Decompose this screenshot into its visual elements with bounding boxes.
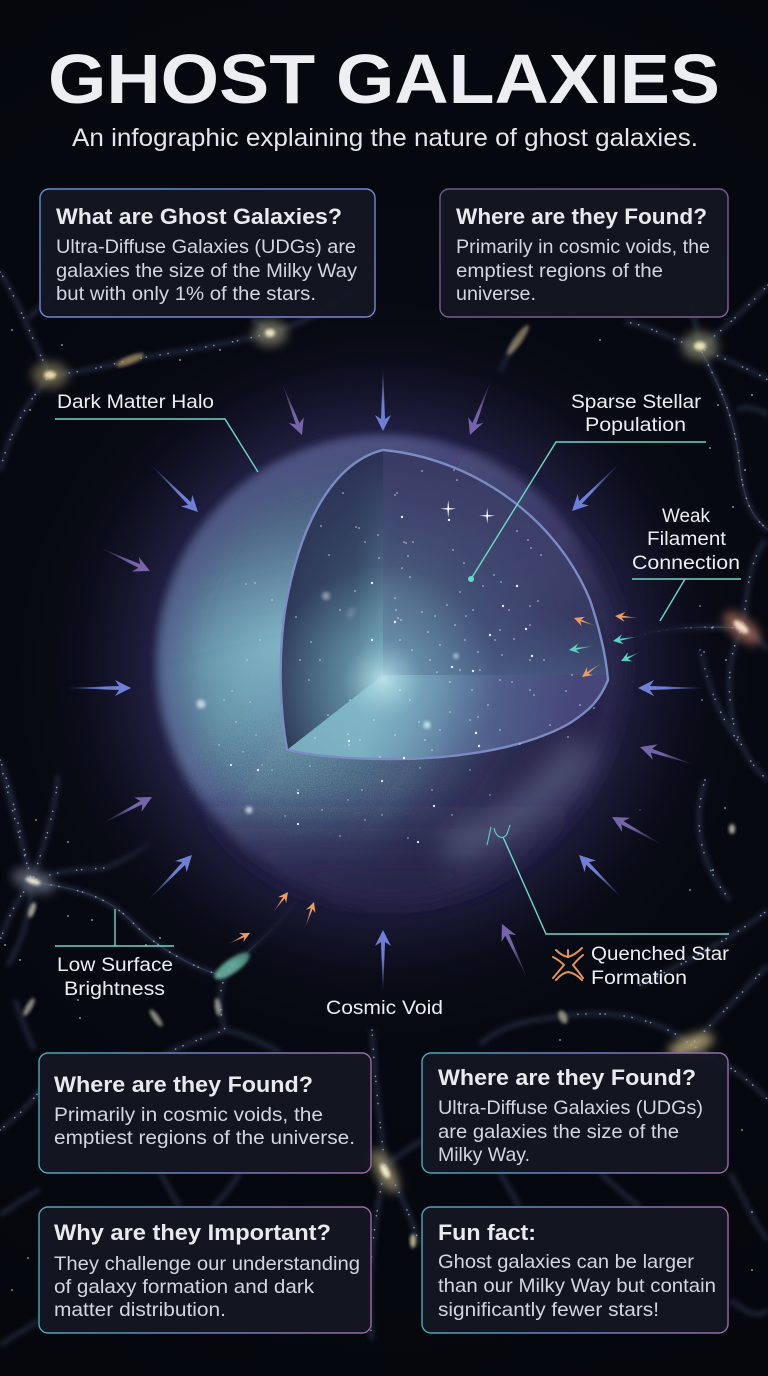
left wall top shade	[285, 450, 383, 675]
label: dark matter halo	[55, 392, 258, 472]
panel: where are they found, top	[440, 189, 728, 317]
stars inside wedge	[296, 470, 594, 758]
panel: fun fact: Fun fact:	[438, 1220, 536, 1245]
panel: where are they found, lower left	[39, 1053, 371, 1173]
subtitle: An infographic explaining the nature of ghost galaxies.	[72, 124, 698, 152]
panel: fun fact: than our Milky Way but contain	[438, 1275, 716, 1297]
panel: where are they found, lower left: Where are they Found?	[54, 1072, 313, 1097]
panel: where are they found, lower left: Primarily in cosmic voids, the	[54, 1104, 323, 1126]
cutaway wedge	[281, 450, 608, 759]
label: sparse stellar population: Sparse Stellar	[571, 392, 702, 413]
panel: where are they found, lower right: Where are they Found?	[438, 1065, 696, 1090]
panel: where are they found, top: emptiest regions of the	[456, 260, 663, 282]
panel: fun fact	[422, 1207, 728, 1333]
panel: where are they found, lower right: Milky Way.	[438, 1144, 530, 1166]
panel: what are ghost galaxies: galaxies the size of the Milky Way	[56, 260, 357, 282]
panel: fun fact: Ghost galaxies can be larger	[438, 1251, 695, 1273]
panel: what are ghost galaxies	[40, 189, 375, 317]
left wedge wall	[281, 450, 383, 750]
label: weak filament connection: Connection	[632, 553, 740, 574]
back right wall	[383, 450, 608, 675]
panel: where are they found, lower right: are galaxies the size of the	[438, 1121, 679, 1143]
label: quenched star formation: Quenched Star	[591, 944, 730, 965]
label: weak filament connection	[632, 506, 741, 621]
panel: why are they important: of galaxy formation and dark	[54, 1276, 314, 1298]
floor of wedge	[287, 675, 608, 759]
panel: why are they important: matter distribution.	[54, 1299, 226, 1321]
filament inflow arrows, bottom left	[225, 889, 319, 949]
panel: what are ghost galaxies: What are Ghost Galaxies?	[56, 204, 342, 229]
panel: what are ghost galaxies: but with only 1% of the stars.	[56, 283, 316, 305]
galaxy blobs on the web	[9, 320, 765, 1248]
panel: where are they found, top: Primarily in cosmic voids, the	[456, 236, 710, 258]
label: sparse stellar population	[468, 392, 706, 582]
cosmic web filaments	[0, 270, 768, 1345]
panel: where are they found, lower left: emptiest regions of the universe.	[54, 1127, 355, 1149]
sphere speckle stars	[196, 583, 490, 842]
label: quenched star formation: Formation	[591, 968, 687, 989]
label: weak filament connection: Filament	[647, 529, 727, 550]
wedge rim	[281, 450, 608, 759]
label: quenched star formation	[487, 825, 730, 989]
label: cosmic void: Cosmic Void	[326, 998, 443, 1019]
label: low surface brightness	[55, 909, 174, 1000]
panel: what are ghost galaxies: Ultra-Diffuse Galaxies (UDGs) are	[56, 236, 356, 258]
panel: why are they important: They challenge our understanding	[54, 1253, 360, 1275]
panel: fun fact: significantly fewer stars!	[438, 1299, 659, 1321]
label: dark matter halo: Dark Matter Halo	[57, 392, 214, 413]
filament inflow arrows, right	[568, 611, 642, 681]
inflow arrows around the void	[65, 365, 706, 995]
title: GHOST GALAXIES	[48, 40, 720, 118]
label: weak filament connection: Weak	[662, 506, 710, 527]
panel: where are they found, lower right	[422, 1053, 728, 1173]
label: low surface brightness: Low Surface	[57, 955, 173, 976]
label: low surface brightness: Brightness	[64, 979, 165, 1000]
core glow	[281, 450, 608, 759]
panel: where are they found, lower right: Ultra-Diffuse Galaxies (UDGs)	[438, 1097, 703, 1119]
label: sparse stellar population: Population	[585, 415, 686, 436]
dark matter halo sphere	[147, 427, 623, 903]
panel: why are they important	[39, 1207, 371, 1333]
panel: halo glow around galaxy	[50, 330, 720, 1000]
panel: where are they found, top: Where are they Found?	[456, 204, 707, 229]
icon: quenched star	[553, 948, 583, 980]
panel: where are they found, top: universe.	[456, 283, 536, 305]
panel: why are they important: Why are they Important?	[54, 1220, 331, 1245]
